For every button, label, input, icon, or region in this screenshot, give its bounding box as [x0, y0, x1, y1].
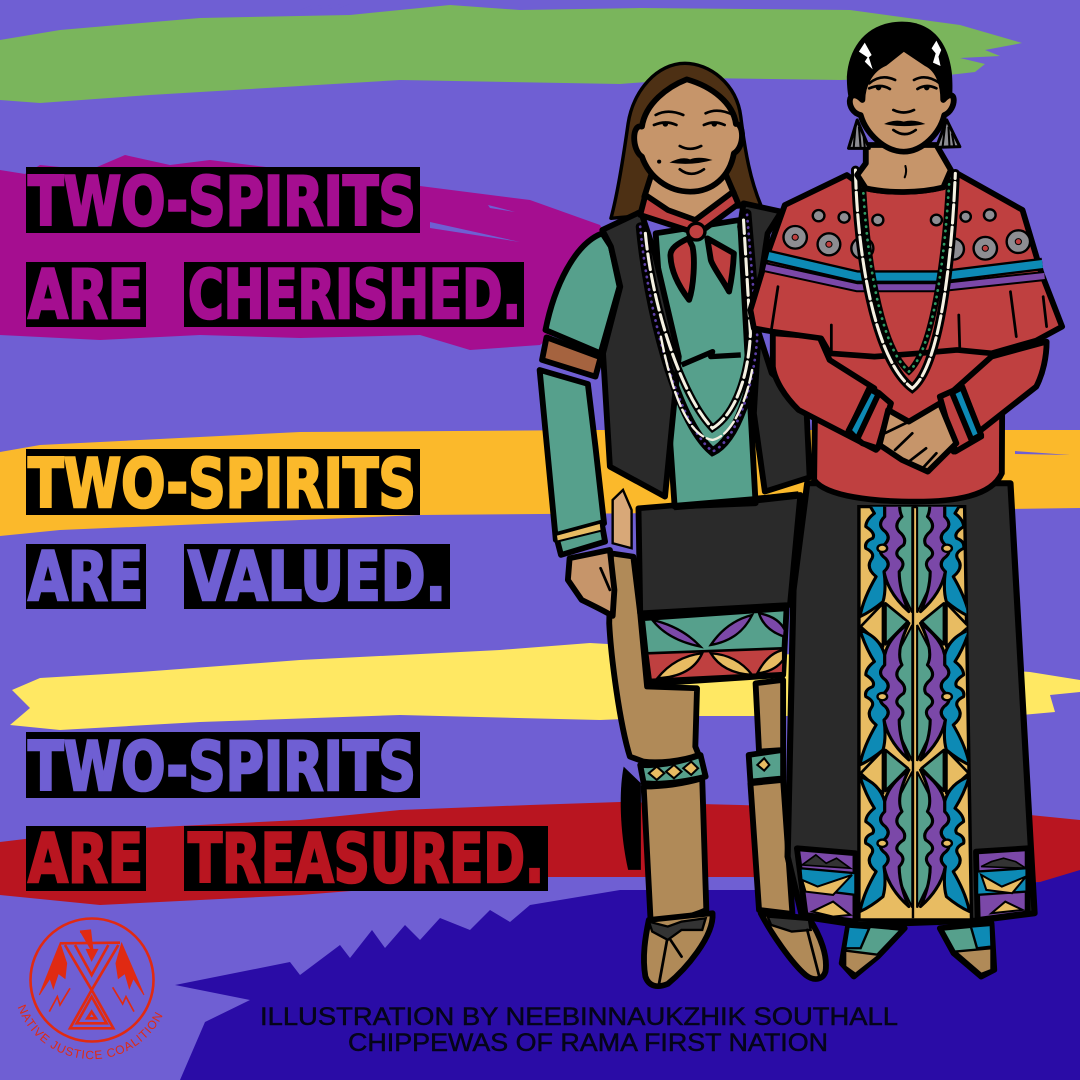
headline: two-spirits are treasured: TREASURED.: [188, 820, 544, 899]
left person neckerchief: [640, 192, 738, 300]
headline: two-spirits are cherished: TWO-SPIRITS: [28, 163, 416, 242]
left person skirt and woven band: [613, 490, 800, 684]
earrings: [849, 120, 960, 148]
illustration credit: ILLUSTRATION BY NEEBINNAUKZHIK SOUTHALL: [260, 1003, 898, 1031]
illustration credit: CHIPPEWAS OF RAMA FIRST NATION: [348, 1029, 828, 1057]
brush streak details: [300, 4, 1070, 455]
headline: two-spirits are treasured: TWO-SPIRITS: [28, 728, 416, 807]
headline: two-spirits are valued: ARE: [28, 538, 143, 617]
skirt hem, right: [976, 848, 1028, 920]
headline: two-spirits are valued: TWO-SPIRITS: [28, 445, 416, 524]
figure: right person: [750, 22, 1062, 977]
logo: Native Justice Coalition: [18, 917, 162, 1060]
right person cuffs and clasped hands: [849, 387, 981, 472]
right person neck and head: [847, 22, 960, 192]
headline: two-spirits are treasured: ARE: [28, 820, 143, 899]
brush stroke: pale yellow: [10, 643, 1080, 730]
left person necklace: [640, 213, 757, 452]
headline: two-spirits are cherished: [26, 163, 524, 335]
logo: Native Justice Coalition: NATIVE JUSTICE COALITION: [18, 1004, 162, 1060]
right person necklace: [855, 170, 955, 388]
illustration: two figures: [540, 22, 1062, 986]
headline: two-spirits are treasured: [26, 728, 548, 899]
left person hair: [611, 63, 761, 218]
right person skirt with beaded panel: [788, 455, 1035, 925]
brush stroke: orange: [0, 430, 1080, 536]
brush stroke: green: [0, 5, 1022, 103]
right person moccasins: [842, 923, 994, 977]
headline: two-spirits are valued: [26, 445, 450, 617]
left person legs and moccasins: [609, 553, 826, 986]
brush stroke: red: [0, 802, 1080, 905]
tunic medallions: [783, 209, 1030, 260]
headline: two-spirits are valued: VALUED.: [188, 538, 446, 617]
left person neck and head: [634, 79, 742, 227]
right person tunic: [750, 173, 1062, 502]
brush stroke: dark blue: [175, 870, 1080, 1080]
left person torso: [540, 203, 810, 616]
brush stroke: magenta: [0, 155, 620, 350]
headline: two-spirits are cherished: CHERISHED.: [188, 256, 521, 335]
skirt hem, left: [797, 848, 855, 922]
illustration credit: [260, 1003, 898, 1057]
left person cuffs and hand: [556, 523, 614, 616]
figure: left person: [540, 63, 826, 986]
headline: two-spirits are cherished: ARE: [28, 256, 143, 335]
